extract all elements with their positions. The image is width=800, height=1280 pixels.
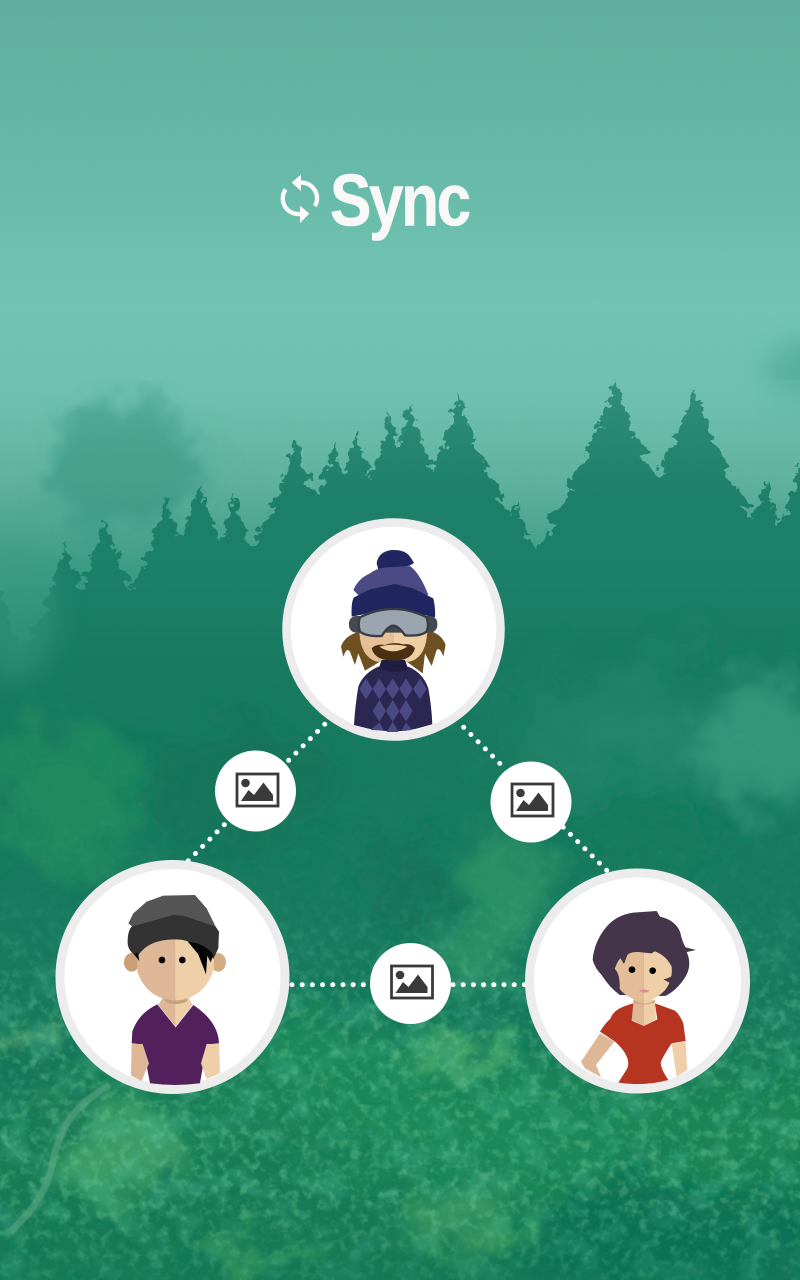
node: image icon left xyxy=(215,750,296,832)
dress xyxy=(600,1003,686,1084)
ears xyxy=(124,953,139,972)
left arm xyxy=(581,1033,614,1077)
logo: Sync xyxy=(283,161,470,242)
face xyxy=(614,949,644,1003)
node: image icon right xyxy=(490,762,572,842)
face xyxy=(359,623,393,663)
hat top xyxy=(353,566,428,607)
icon: sync arrows xyxy=(283,174,317,223)
pompon xyxy=(377,550,414,569)
icon: picture xyxy=(237,774,278,806)
node: image icon centre xyxy=(370,943,451,1024)
connector: top to left, lower dots xyxy=(188,825,224,861)
sweater xyxy=(354,667,432,731)
panel: top avatar with goggles xyxy=(286,522,500,736)
connector: left to centre dots xyxy=(292,982,366,987)
fringe xyxy=(619,937,659,964)
shirt xyxy=(132,1004,219,1085)
mouth xyxy=(379,645,407,651)
hat top xyxy=(128,895,216,930)
hat band xyxy=(128,915,219,959)
lips xyxy=(639,989,650,993)
connector: top to right, lower dots xyxy=(563,827,607,870)
eyes xyxy=(629,966,635,973)
goggle strap xyxy=(349,616,437,633)
neck xyxy=(158,997,176,1027)
right arm xyxy=(201,1044,220,1079)
hat band xyxy=(352,584,435,617)
hair xyxy=(341,630,446,673)
connector: top to right, upper dots xyxy=(464,727,500,764)
collar xyxy=(378,660,408,672)
neck xyxy=(385,657,403,665)
beard xyxy=(372,643,415,661)
eyes xyxy=(159,957,165,963)
connector: centre to right dots xyxy=(453,982,525,987)
panel: right avatar with red dress xyxy=(530,873,746,1089)
icon: picture xyxy=(512,784,553,816)
icon: picture xyxy=(392,966,432,998)
fringe xyxy=(187,941,213,974)
sweater diamonds xyxy=(359,678,427,732)
hair back xyxy=(593,911,696,996)
connector: top to left, upper dots xyxy=(289,723,326,760)
panel: left avatar with beanie xyxy=(60,864,285,1090)
face xyxy=(137,938,176,1001)
left arm xyxy=(131,1044,149,1081)
right arm xyxy=(672,1042,687,1077)
side strands xyxy=(614,968,620,995)
title text: Sync xyxy=(330,161,470,242)
neck xyxy=(632,999,644,1026)
goggles xyxy=(359,609,428,636)
